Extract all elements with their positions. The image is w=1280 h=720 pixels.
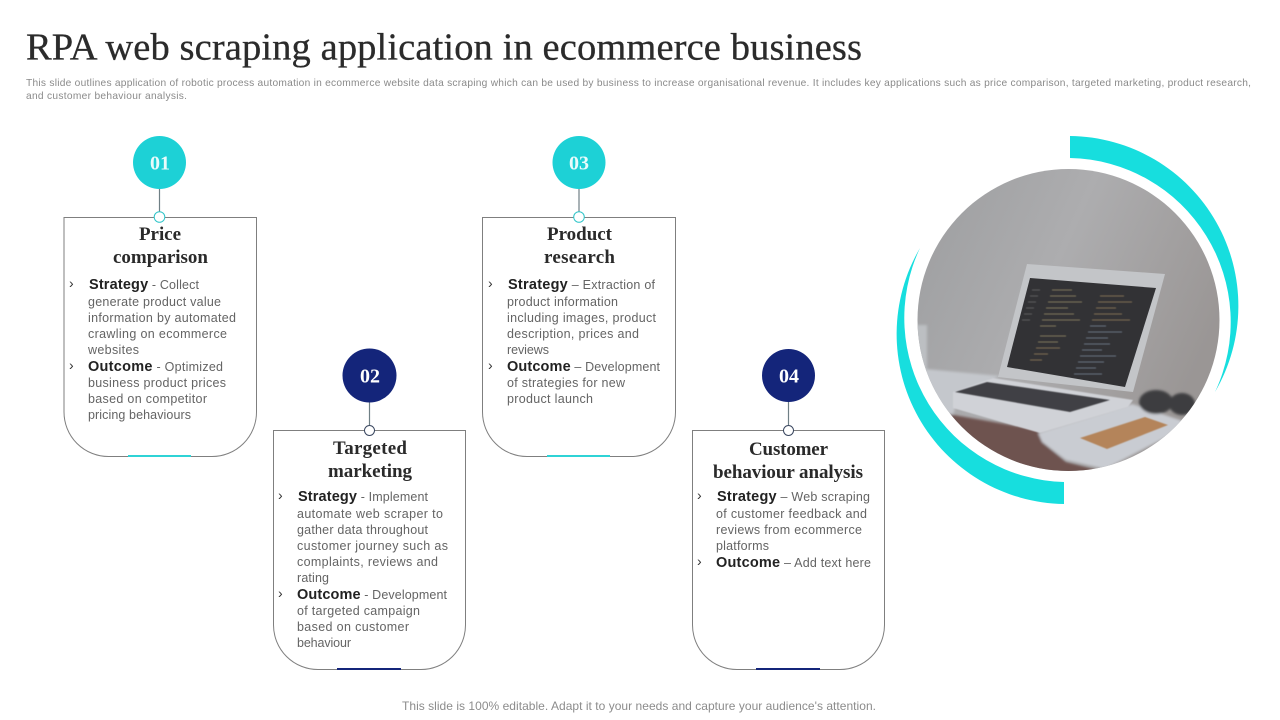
phone: [1080, 417, 1168, 449]
node 01: [154, 212, 165, 222]
heading 04: behaviour analysis: [713, 462, 863, 483]
description: This slide outlines application of robotic process automation in ecommerce website data scraping which can be used by business to increase organisational revenue. It includes key applications such as price comparison, targeted marketing, product research,: [26, 78, 1251, 89]
laptop lid: [998, 264, 1165, 392]
body text 02: of targeted campaign: [297, 604, 420, 618]
card outline 03: [482, 218, 676, 456]
heading 01: [113, 224, 208, 268]
body text 02: rating: [297, 571, 329, 585]
body text 01: [69, 275, 236, 422]
body text 01: ›: [69, 357, 74, 373]
node 04: [784, 426, 794, 436]
heading 03: [544, 224, 615, 268]
accent bar 03: [547, 455, 610, 457]
body text 03: product information: [507, 295, 618, 309]
description: [26, 78, 1251, 102]
connector 03: [578, 188, 580, 212]
badge 03: [552, 136, 606, 189]
badge 02: 02: [360, 366, 380, 388]
body text 01: information by automated: [88, 311, 236, 325]
body text 01: ›: [69, 275, 74, 291]
body text 04: ›: [697, 487, 702, 503]
panel: targeted marketing: [274, 348, 466, 670]
code on screen: [1022, 290, 1132, 374]
body text 02: Strategy - Implement: [298, 489, 429, 505]
heading 03: research: [544, 247, 615, 268]
body text 02: [278, 487, 448, 650]
connector 04: [788, 401, 790, 425]
body text 03: ›: [488, 275, 493, 291]
heading 01: comparison: [113, 247, 208, 268]
decorative arc: bottom left: [897, 248, 1064, 504]
heading 04: [713, 439, 863, 483]
heading 02: marketing: [328, 461, 412, 482]
card outline 02: [274, 430, 466, 670]
heading 01: Price: [139, 224, 181, 245]
heading 02: Targeted: [333, 438, 407, 459]
connector 01: [158, 188, 160, 212]
body text 01: Outcome - Optimized: [88, 359, 223, 375]
body text 02: ›: [278, 585, 283, 601]
node 02: [364, 426, 374, 436]
body text 04: reviews from ecommerce: [716, 523, 862, 537]
panel: customer behaviour analysis: [692, 349, 884, 670]
body text 04: [697, 487, 871, 571]
heading 03: Product: [547, 224, 613, 245]
card outline 01: [64, 218, 256, 456]
badge 04: 04: [779, 366, 799, 388]
body text 03: [488, 275, 661, 406]
body text 03: product launch: [507, 392, 593, 406]
accent bar 02: [337, 668, 401, 670]
body text 01: Strategy - Collect: [89, 277, 200, 293]
body text 04: of customer feedback and: [716, 507, 867, 521]
body text 02: Outcome - Development: [297, 587, 448, 603]
heading 02: [328, 438, 412, 482]
body text 02: complaints, reviews and: [297, 555, 438, 569]
screen: [1007, 278, 1156, 387]
photo: laptop on desk: [915, 165, 1225, 485]
badge 01: [133, 136, 186, 189]
body text 02: gather data throughout: [297, 523, 429, 537]
body text 03: Strategy – Extraction of: [508, 277, 656, 293]
body text 03: ›: [488, 357, 493, 373]
panel: price comparison: [64, 136, 256, 457]
body text 02: customer journey such as: [297, 539, 448, 553]
body text 02: automate web scraper to: [297, 507, 443, 521]
body text 03: including images, product: [507, 311, 657, 325]
body text 01: generate product value: [88, 295, 221, 309]
body text 03: Outcome – Development: [507, 359, 661, 375]
connector 02: [368, 401, 370, 425]
body text 02: ›: [278, 487, 283, 503]
body text 01: crawling on ecommerce: [88, 327, 227, 341]
body text 03: reviews: [507, 343, 549, 357]
decorative arc: top right: [1070, 136, 1238, 392]
card outline 04: [692, 430, 884, 670]
title: RPA web scraping application in ecommerce business: [26, 26, 862, 68]
keyboard: [955, 382, 1110, 412]
accent bar 04: [756, 668, 820, 670]
body text 04: ›: [697, 553, 702, 569]
body text 02: behaviour: [297, 636, 351, 650]
body text 04: Outcome – Add text here: [716, 555, 871, 571]
desk and laptop backdrop: [915, 325, 1195, 485]
body text 01: websites: [87, 343, 139, 357]
footer note: This slide is 100% editable. Adapt it to your needs and capture your audience's attention.: [402, 699, 876, 713]
body text 01: based on competitor: [88, 392, 207, 406]
wall: [915, 165, 1225, 475]
body text 01: pricing behaviours: [88, 408, 191, 422]
body text 04: platforms: [716, 539, 769, 553]
body text 02: based on customer: [297, 620, 409, 634]
badge 02: [342, 348, 396, 402]
body text 03: of strategies for new: [507, 376, 626, 390]
laptop base: [953, 378, 1133, 433]
badge 04: [762, 349, 815, 402]
badge 01: 01: [150, 152, 170, 174]
body text 03: description, prices and: [507, 327, 639, 341]
body text 01: business product prices: [88, 376, 226, 390]
description: and customer behaviour analysis.: [26, 91, 187, 102]
body text 04: Strategy – Web scraping: [717, 489, 870, 505]
node 03: [574, 212, 584, 222]
panel: product research: [482, 136, 676, 457]
badge 03: 03: [569, 152, 589, 174]
accent bar 01: [128, 455, 191, 457]
heading 04: Customer: [749, 439, 829, 460]
